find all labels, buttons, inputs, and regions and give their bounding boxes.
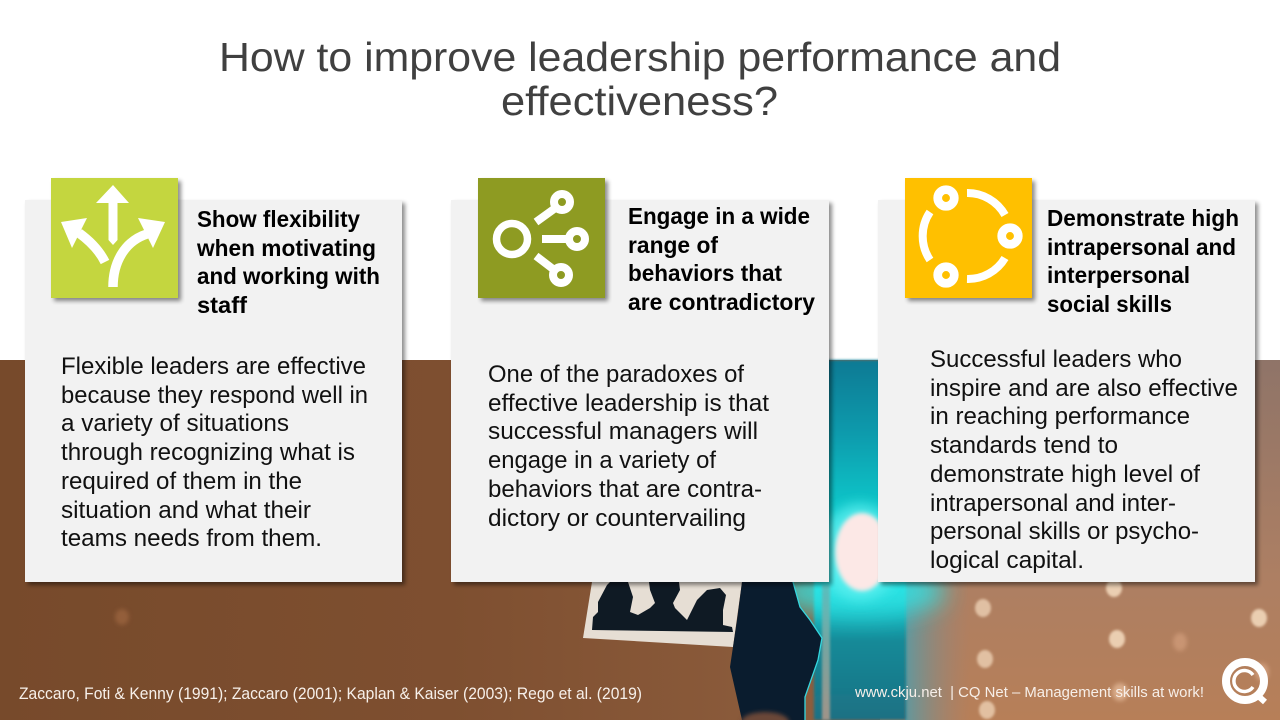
text block: flexibility: required of them in the: [61, 468, 302, 495]
text block: contradictory behaviors: engage in a variety of: [488, 447, 716, 474]
heading: contradictory behaviors: range of: [628, 232, 718, 258]
heading: flexibility: staff: [197, 292, 247, 318]
heading: social skills: intrapersonal and: [1047, 234, 1236, 260]
heading: flexibility: [196, 206, 380, 318]
heading: flexibility: and working with: [197, 263, 380, 289]
text block: social skills: standards tend to: [930, 432, 1118, 459]
heading: contradictory behaviors: are contradictory: [628, 289, 815, 315]
text block: social skills: in reaching performance: [930, 403, 1190, 430]
icon: CQ logo: [1226, 662, 1265, 702]
heading: contradictory behaviors: behaviors that: [628, 260, 782, 286]
background photo: [0, 360, 1280, 720]
text block: contradictory behaviors: successful managers will: [488, 418, 758, 445]
icon: branching nodes: [478, 178, 608, 301]
panel: social skills: [878, 178, 1258, 585]
panel: flexibility: [25, 178, 405, 585]
text block: flexibility: teams needs from them.: [61, 525, 322, 552]
text block: social skills: inspire and are also effective: [930, 375, 1238, 402]
heading: social skills: interpersonal: [1047, 262, 1190, 288]
text block: contradictory behaviors: effective leadership is that: [488, 390, 769, 417]
title: effectiveness?: [501, 78, 778, 124]
text block: social skills: Successful leaders who: [930, 346, 1182, 373]
heading: contradictory behaviors: Engage in a wide: [628, 203, 810, 229]
text block: social skills: demonstrate high level of: [930, 461, 1200, 488]
text block: social skills: personal skills or psycho-: [930, 518, 1199, 545]
footer credit: www.ckju.net | CQ Net – Management skills at work!: [854, 685, 1204, 701]
heading: flexibility: Show flexibility: [197, 206, 360, 232]
title: [219, 34, 1061, 124]
text block: social skills: logical capital.: [930, 547, 1084, 574]
text block: contradictory behaviors: One of the paradoxes of: [488, 361, 744, 388]
heading: social skills: social skills: [1047, 291, 1172, 317]
title: How to improve leadership performance and: [219, 34, 1061, 80]
citation: Zaccaro, Foti & Kenny (1991); Zaccaro (2001); Kaplan & Kaiser (2003); Rego et al. (2019): [19, 685, 642, 703]
text block: flexibility: Flexible leaders are effective: [61, 353, 366, 380]
heading: contradictory behaviors: [628, 203, 815, 315]
heading: social skills: [1047, 205, 1239, 317]
text block: flexibility: a variety of situations: [61, 410, 289, 437]
text block: social skills: [930, 346, 1238, 574]
icon: three-way arrows: [51, 178, 181, 301]
panel: contradictory behaviors: [451, 178, 832, 585]
text block: social skills: intrapersonal and inter-: [930, 490, 1176, 517]
heading: flexibility: when motivating: [196, 235, 376, 261]
heading: social skills: Demonstrate high: [1047, 205, 1239, 231]
text block: flexibility: [61, 353, 368, 552]
text block: flexibility: because they respond well in: [61, 382, 368, 409]
text block: contradictory behaviors: [488, 361, 769, 532]
text block: contradictory behaviors: dictory or countervailing: [488, 505, 746, 532]
text block: flexibility: situation and what their: [61, 497, 311, 524]
text block: flexibility: through recognizing what is: [61, 439, 355, 466]
text block: contradictory behaviors: behaviors that are contra-: [488, 476, 762, 503]
icon: connected cycle: [905, 178, 1035, 301]
